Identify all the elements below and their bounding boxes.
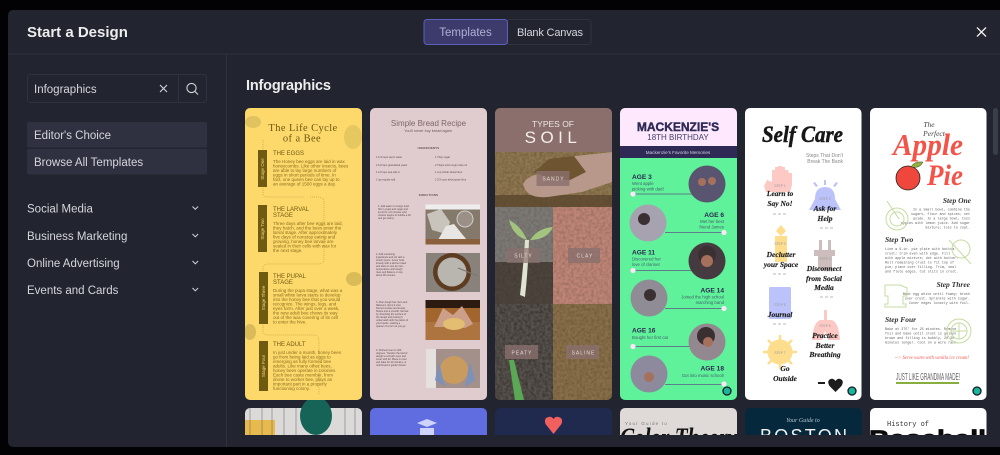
card: self care: your Space: [763, 260, 799, 269]
card: simple bread recipe: and get foamy.: [378, 217, 395, 220]
card: self care: [745, 108, 862, 400]
card: mackenzie's 18th birthday: Mackenzie's Favorite Memories: [646, 150, 711, 155]
pie steps: Step One: [943, 196, 972, 205]
card: life cycle of a bee: small white larva starts to develop: [273, 292, 341, 298]
card: simple bread recipe: degrees. Transfer the loaf of: [376, 352, 408, 355]
card: self care: STEP 5: [774, 303, 786, 307]
card: the perfect apple pie: Apple: [891, 127, 963, 162]
category list: Events and Cards: [27, 285, 119, 297]
card: life cycle of a bee: emerging as fully formed bee: [273, 359, 332, 364]
card: the perfect apple pie: The: [923, 120, 935, 129]
photo: clay: [553, 207, 612, 304]
card: simple bread recipe: your hands, rotating a: [376, 322, 401, 325]
card: self care: STEP 1: [774, 184, 786, 188]
card: life cycle of a bee: drone to worker bee, plays an: [273, 377, 333, 382]
card: life cycle of a bee: THE ADULT: [273, 342, 306, 348]
card: mackenzie's 18th birthday: Went apple: [632, 181, 654, 186]
card: boston: BOSTON: [760, 426, 847, 446]
icon: journal: [769, 287, 791, 319]
card: boston: [745, 408, 862, 435]
card: life cycle of a bee: go from being laid as eggs to: [273, 354, 331, 360]
card: the perfect apple pie: brown and filling is bubbly, 20-30: [885, 336, 954, 341]
card: heart: [495, 408, 612, 435]
card: simple bread recipe: 4. Preheat oven to 400: [376, 349, 402, 352]
card: the perfect apple pie: Roll remaining crust to fit top of: [885, 260, 954, 266]
card: simple bread recipe: the dough and tucking it: [376, 316, 403, 319]
green icons: [885, 201, 971, 343]
card: life cycle of a bee: functioning colony.: [273, 386, 310, 391]
card: life cycle of a bee: of a Bee: [283, 134, 321, 144]
card: the perfect apple pie: Step Four: [885, 315, 916, 324]
tab switch: templates / blank canvas: [424, 20, 591, 44]
photo: peaty: [495, 304, 553, 400]
second row of template cards: [245, 400, 986, 435]
card: mackenzie's 18th birthday: Met her best: [700, 219, 725, 224]
card: self care: Better: [815, 341, 834, 350]
card: simple bread recipe: Shape into a smooth, flat loaf: [376, 310, 409, 313]
card: life cycle of a bee: they hatch, and the bees enter the: [273, 226, 342, 230]
card: self care: from Social: [806, 274, 843, 283]
card: self care: Practice: [812, 331, 838, 340]
card: mackenzie's 18th birthday: MACKENZIE'S: [637, 120, 719, 134]
card: self care: STEP 4: [819, 257, 831, 261]
card: self care: Declutter: [766, 250, 795, 259]
card: mackenzie's 18th birthday: AGE 18: [701, 366, 724, 372]
card: life cycle of a bee: the new adult bee chews its way: [273, 310, 338, 316]
card: self care: Disconnect: [806, 264, 842, 273]
card: mackenzie's 18th birthday: AGE 6: [704, 212, 724, 219]
icon: lungs: [812, 310, 840, 340]
card: self care: Outside: [773, 374, 798, 383]
card: simple bread recipe: floured surface and knead.: [376, 307, 406, 310]
card: mackenzie's 18th birthday: AGE 16: [632, 328, 656, 334]
card: types of soil: [495, 108, 612, 400]
card: life cycle of a bee: are able to lay large numbers of: [273, 168, 337, 173]
tab switch: templates / blank canvas: Blank Canvas: [517, 27, 584, 39]
card: self care: Go: [780, 364, 790, 373]
card: life cycle of a bee: The Life Cycle: [268, 123, 338, 134]
card: simple bread recipe: INGREDIENTS: [418, 146, 439, 150]
card: life cycle of a bee: recognize. The wings, legs, and: [273, 302, 337, 306]
card: life cycle of a bee: the next stage.: [273, 248, 303, 253]
card: mackenzie's 18th birthday: love of clarinet: [632, 262, 661, 267]
card: simple bread recipe: 2. Add remaining: [376, 253, 395, 256]
card: life cycle of a bee: to enter the hive.: [273, 320, 307, 324]
card: self care: STEP 6: [819, 324, 831, 328]
card: life cycle of a bee: THE LARVAL: [273, 207, 310, 213]
photo: flour: [426, 204, 480, 244]
card: simple bread recipe: 3. After dough has risen and: [376, 301, 408, 304]
card: simple bread recipe: 2 Tbsps extra virgin olive oil: [435, 163, 467, 167]
card: life cycle of a bee: STAGE: [273, 213, 293, 219]
card: life cycle of a bee: eggs in short periods of time. In: [273, 172, 336, 178]
badge: [973, 387, 981, 395]
card: mackenzie's 18th birthday: [620, 108, 737, 400]
card: simple bread recipe: mixture begins to bubble a bit: [378, 214, 411, 217]
soil labels: CLAY: [577, 254, 593, 260]
card: simple bread recipe: 1. Add water to a large bowl.: [378, 205, 410, 208]
card: life cycle of a bee: THE EGGS: [273, 151, 304, 157]
card: life cycle of a bee: adults. Like many other bees,: [273, 364, 332, 368]
card: the perfect apple pie: Line a 9-in. pie plate with bottom: [885, 247, 954, 252]
icon: plug: [814, 240, 835, 270]
photo: sandy: [495, 152, 612, 207]
card: types of soil: SOIL: [525, 128, 581, 147]
button: editor's choice: [27, 122, 207, 148]
card: self care: STEP 2: [819, 197, 831, 201]
card: life cycle of a bee: honey bees operate in colonies.: [273, 368, 337, 373]
card: the perfect apple pie: pie; place over filling. Trim, seal: [885, 265, 956, 270]
card: types of soil: TYPES OF: [532, 119, 574, 129]
card: life cycle of a bee: honeycombs. Like other insects, bees: [273, 164, 349, 168]
card: life cycle of a bee: out of the wax covering of its cell: [273, 315, 338, 320]
card: life cycle of a bee: Stage Two: [260, 218, 265, 240]
card: life cycle of a bee: [244, 108, 362, 400]
card: the perfect apple pie: foil and bake until crust is golden: [885, 332, 956, 336]
card: mackenzie's 18th birthday: Bought her first car: [632, 335, 669, 340]
card: the perfect apple pie: Bake at 375° for 25 minutes. Remove: [885, 327, 956, 332]
card: color theory: [620, 408, 737, 435]
card: self care: Journal: [767, 310, 793, 319]
card: the perfect apple pie: Beat egg white until foamy; brush: [903, 292, 970, 297]
card: self care: Breathing: [808, 350, 841, 359]
icon: bell: [809, 180, 841, 210]
card: mackenzie's 18th birthday: AGE 14: [701, 288, 724, 294]
card: life cycle of a bee: an average of 1500 eggs a day.: [273, 182, 336, 186]
card: mackenzie's 18th birthday: Discovered her: [632, 256, 661, 262]
card: the perfect apple pie: Step Three: [936, 280, 971, 289]
card: the perfect apple pie: apples with lemon juice. Add sugar: [901, 221, 970, 226]
card: the perfect apple pie: crust; trim even with edge. Fill: [885, 252, 950, 256]
card: mackenzie's 18th birthday: 18TH BIRTHDAY: [647, 133, 709, 142]
card: illustrated faces: [245, 400, 362, 435]
photo: saline: [553, 304, 612, 400]
card: simple bread recipe: rises and flattens on top,: [376, 271, 404, 274]
card: life cycle of a bee: five days of nonstop eating and: [273, 234, 336, 240]
card: the perfect apple pie: Cover edges loosely with foil.: [909, 301, 970, 306]
card: self care: Media: [813, 283, 834, 292]
card: simple bread recipe: 2 1/2 tsps granulated yeast: [376, 163, 407, 167]
icon: heart: [818, 379, 843, 392]
button: browse all templates: Browse All Templates: [34, 157, 143, 169]
card: history of baseball: Baseball: [869, 426, 986, 453]
card: self care: Break The Bank: [807, 159, 843, 165]
card: simple bread recipe: DIRECTIONS: [419, 193, 438, 197]
card: simple bread recipe: flattened, dump it onto: [376, 304, 401, 307]
photo: dough bowl: [426, 253, 480, 292]
card: life cycle of a bee: growing, honey bee larvae are: [273, 239, 334, 244]
card: life cycle of a bee: fact, one queen bee can lay up to: [273, 177, 340, 182]
photo: kneading: [426, 300, 480, 340]
card: simple bread recipe: Simple Bread Recipe: [391, 119, 467, 128]
card: simple bread recipe: about 90 minutes.: [376, 274, 396, 277]
search box: Infographics: [34, 84, 97, 96]
card: the perfect apple pie: --> Serve warm with vanilla ice cream!: [895, 355, 969, 361]
card: the perfect apple pie: Step Two: [885, 235, 914, 244]
card: the perfect apple pie: sugars, flour and spices; set: [911, 212, 970, 217]
card: the perfect apple pie: Pie: [926, 159, 963, 192]
card: mackenzie's 18th birthday: Got into music school!: [682, 373, 724, 378]
card: life cycle of a bee: Stage Four: [261, 354, 266, 377]
soil labels: SALINE: [572, 350, 595, 356]
card: history of baseball: History of: [887, 421, 929, 429]
card: the perfect apple pie: mixture; toss to coat.: [925, 226, 970, 230]
card: simple bread recipe: Stir in yeast and sugar and: [378, 208, 408, 211]
badge: [723, 387, 731, 395]
button: editor's choice: Editor's Choice: [34, 130, 111, 142]
card: simple bread recipe: and allow to rest at room: [376, 265, 403, 268]
card: life cycle of a bee: into the honey bee that you would: [273, 297, 341, 302]
card: mackenzie's 18th birthday: Joined the high school: [681, 294, 724, 300]
card: mackenzie's 18th birthday: AGE 3: [632, 174, 652, 181]
card: simple bread recipe: 1 1/3 cups warm water: [376, 155, 402, 159]
photo: baked loaf: [426, 349, 480, 388]
category list: Business Marketing: [27, 231, 127, 243]
card: graduation: [370, 408, 487, 435]
card: self care: Learn to: [766, 189, 793, 198]
card: mackenzie's 18th birthday: AGE 11: [632, 250, 655, 256]
card: simple bread recipe: 1 tsp regular salt: [376, 178, 395, 182]
category list: Online Advertising: [27, 258, 120, 270]
card: simple bread recipe: quarter of a turn as you go.: [376, 325, 406, 328]
icon: sun: [763, 335, 797, 369]
card: mackenzie's 18th birthday: picking with dad!: [632, 186, 664, 192]
card: life cycle of a bee: sealed in their cells with wax for: [273, 244, 337, 248]
card: life cycle of a bee: important part in a properly: [273, 382, 328, 386]
card: life cycle of a bee: STAGE: [273, 280, 293, 286]
heading: infographics: Infographics: [246, 78, 331, 94]
card: life cycle of a bee: Stage Three: [261, 285, 266, 310]
card: self care: Help: [816, 214, 833, 223]
card: mackenzie's 18th birthday: marching band: [696, 300, 725, 305]
card: simple bread recipe: temperature until dough: [376, 268, 403, 271]
card: simple bread recipe: You'll never buy bread again: [404, 129, 452, 133]
card: self care: Self Care: [762, 122, 843, 147]
category list: [27, 204, 198, 297]
card: simple bread recipe: 2 2/3 cups all-purpose flour: [435, 178, 466, 182]
card: the perfect apple pie: with apple mixture; dot with butter.: [885, 256, 958, 261]
category list: Social Media: [27, 204, 93, 216]
card: the perfect apple pie: and flute edges. Cut slits in crust.: [885, 270, 958, 274]
photo: silty: [495, 207, 553, 304]
card: simple bread recipe: dough to a Dutch oven and: [376, 355, 407, 358]
card: simple bread recipe: cover with lid. Place in oven: [376, 358, 407, 361]
card: the perfect apple pie: Perfect: [922, 129, 946, 138]
soil labels: SANDY: [542, 176, 565, 182]
card: simple bread recipe: by stretching the surface of: [376, 313, 406, 316]
card: life cycle of a bee: During the pupa stage, what was a: [273, 288, 343, 293]
card: self care: STEP 3: [774, 242, 786, 246]
card: self care: Steps That Don't: [806, 153, 844, 159]
card: life cycle of a bee: THE PUPAL: [273, 274, 307, 280]
badge: [848, 387, 856, 395]
card: life cycle of a bee: In just under a month, honey bees: [273, 350, 342, 355]
button: browse all templates: [27, 149, 207, 174]
card: simple bread recipe: and bake for 40 minutes, or: [376, 361, 407, 364]
card: the perfect apple pie: In a small bowl, combine the: [913, 208, 970, 212]
card: self care: Say No!: [767, 199, 793, 208]
card: color theory: Your Guide to: [625, 421, 668, 426]
search box: [28, 74, 206, 102]
card: the perfect apple pie: minutes longer. Cool on a wire rack.: [885, 340, 958, 346]
card: history of baseball: [870, 408, 986, 435]
title: Start a Design: [27, 24, 128, 41]
icon: apple: [896, 162, 923, 190]
card: simple bread recipe: [370, 108, 487, 400]
card: boston: Your Guide to: [786, 418, 820, 424]
card: life cycle of a bee: eyes form. After just over a week,: [273, 306, 340, 311]
card: simple bread recipe: until bread is golden brown.: [376, 364, 407, 367]
soil labels: PEATY: [511, 350, 533, 356]
card: life cycle of a bee: Each bee caste member, from: [273, 372, 333, 378]
card: life cycle of a bee: Three days after bee eggs are laid,: [273, 221, 343, 226]
scrollbar: [993, 108, 998, 155]
card: self care: STEP 7: [774, 351, 786, 355]
card: mackenzie's 18th birthday: friend James: [699, 224, 724, 230]
card: the perfect apple pie: aside. In a large bowl, toss: [913, 216, 970, 222]
card: simple bread recipe: let sit for 4-5 minutes until: [378, 211, 407, 214]
card: color theory: Color Theory: [620, 423, 737, 452]
card: life cycle of a bee: larval stage. After approximately: [273, 230, 338, 235]
card: life cycle of a bee: The Honey bee eggs are laid in wax: [273, 159, 346, 164]
card: simple bread recipe: sturdy spoon. Cover bowl: [376, 259, 405, 262]
card: the perfect apple pie: [870, 108, 986, 400]
card: simple bread recipe: 1 Tbsp sugar: [435, 155, 450, 159]
card: life cycle of a bee: Stage One: [260, 158, 265, 180]
card: simple bread recipe: 1 1/2 tsps sea salt or: [376, 170, 400, 174]
soil labels: [505, 171, 600, 359]
card: simple bread recipe: 1 cup whole wheat flour: [435, 170, 462, 174]
soil labels: SILTY: [514, 254, 533, 260]
tab switch: templates / blank canvas: Templates: [439, 27, 492, 39]
card: simple bread recipe: underneath with the palms of: [376, 319, 408, 322]
icon: close: [977, 28, 986, 36]
card: the perfect apple pie: over crust. Sprinkle with sugar.: [905, 296, 970, 302]
icon: candle: [775, 225, 787, 262]
card: simple bread recipe: ingredients and stir with a: [376, 256, 405, 259]
icon: hand: [764, 166, 792, 192]
card: simple bread recipe: loosely with a kitchen towel: [376, 262, 407, 265]
card: self care: Ask for: [813, 204, 836, 213]
